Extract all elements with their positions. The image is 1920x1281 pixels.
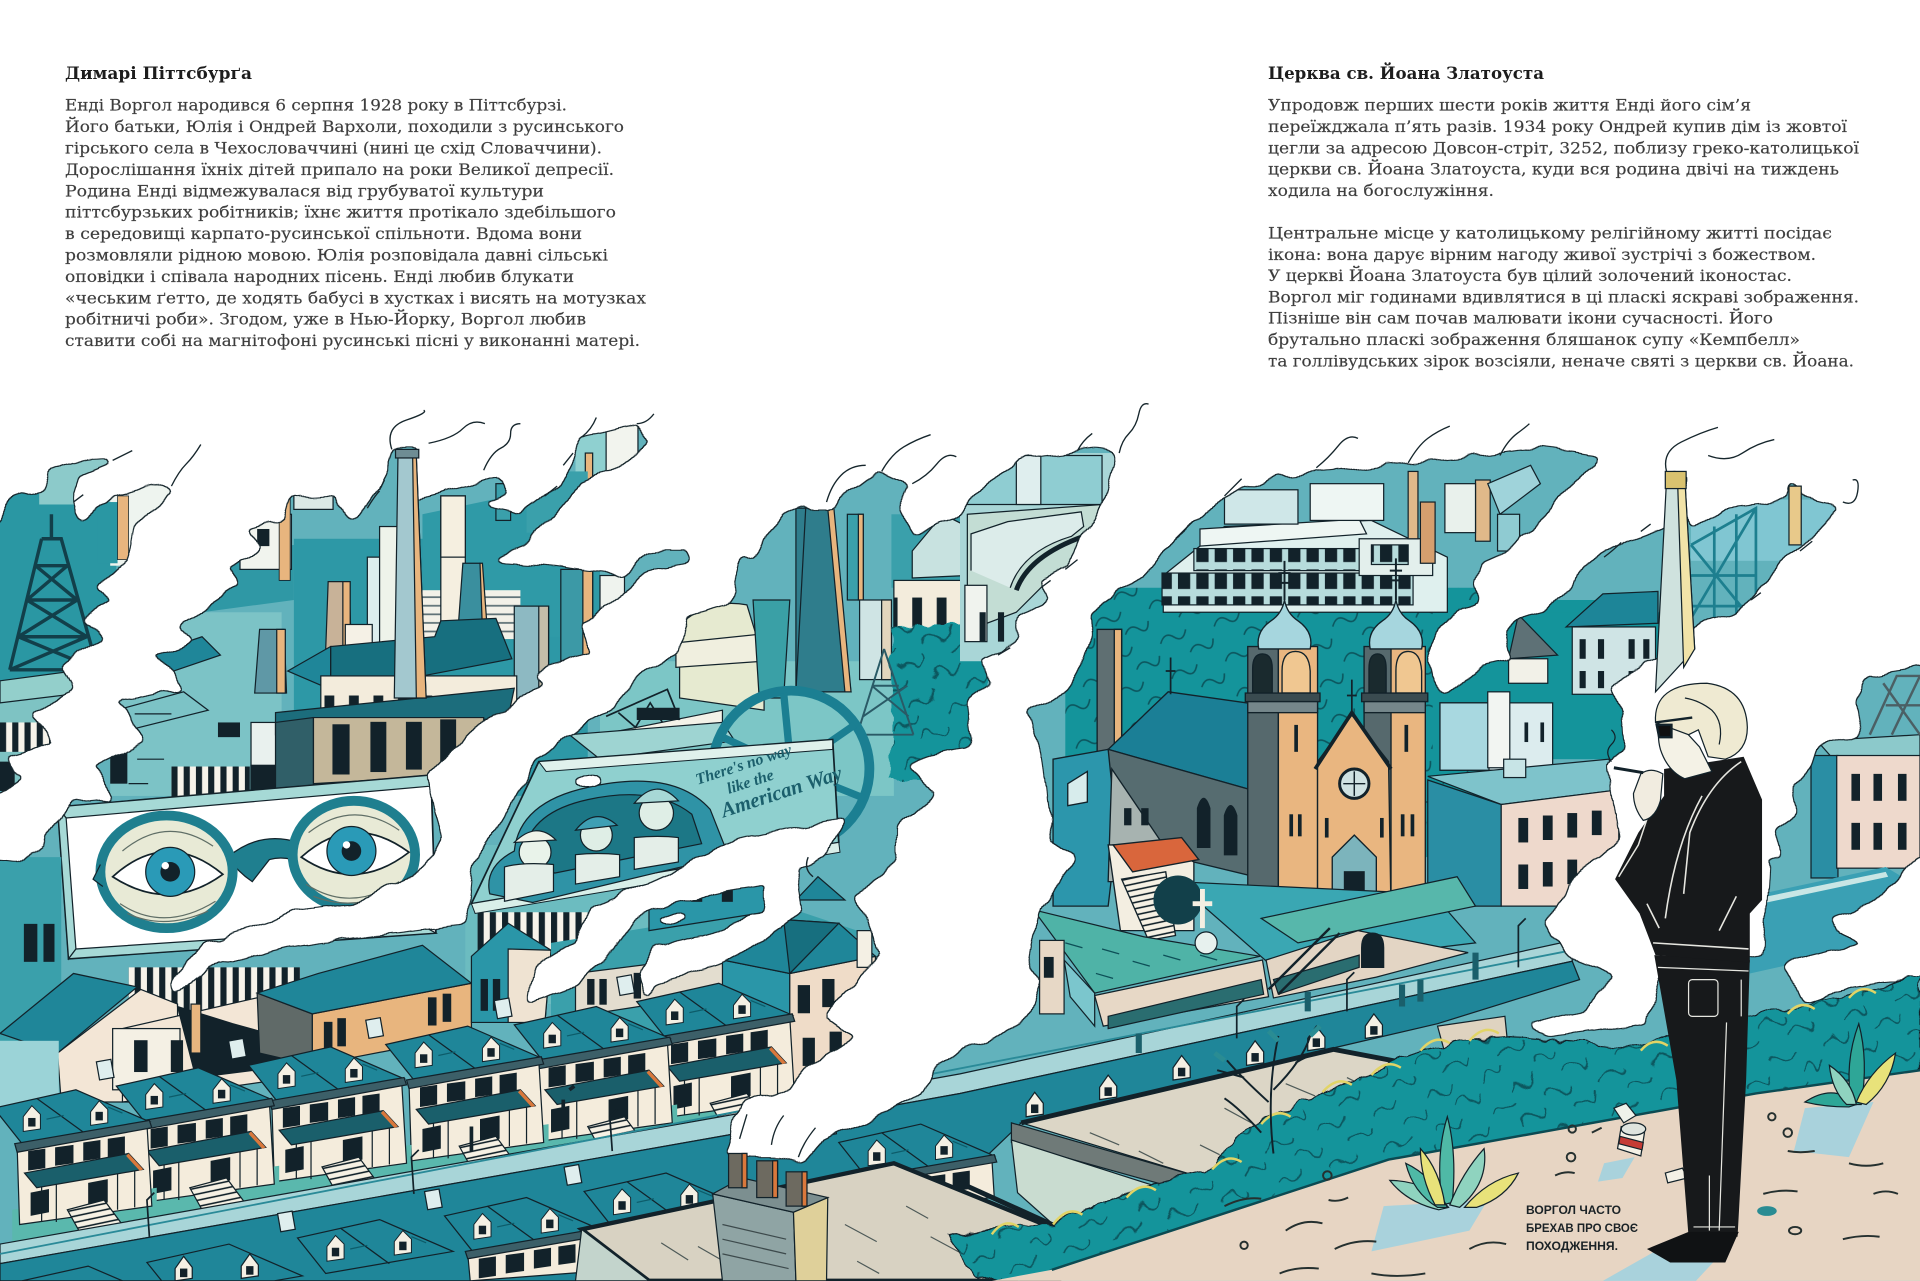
pale distant buildings upper centre: [960, 453, 1119, 661]
text block: Church of St John Chrysostom: ходила на богослужіння.: [1268, 182, 1494, 200]
factory block with chimneys: [251, 425, 638, 797]
text block: Pittsburgh chimneys: піттсбурзьких робітників; їхнє життя протікало здебільшого: [65, 204, 616, 222]
right edge building: [1750, 676, 1920, 973]
text block: Pittsburgh chimneys: Енді Воргол народився 6 серпня 1928 року в Піттсбурзі.: [65, 97, 567, 115]
text block: Church of St John Chrysostom: брутально пласкі зображення бляшанок супу «Кемпбелл»: [1268, 331, 1800, 349]
heading: Church of St John Chrysostom: Церква св. Йоана Златоуста: [1268, 62, 1544, 84]
car body: [489, 781, 729, 902]
scene base tone: [0, 416, 1920, 1281]
flat roof in the foreground right: [960, 1049, 1450, 1224]
church of St John Chrysostom: [1053, 558, 1428, 940]
Warhol figure in black jacket and trousers: [1608, 683, 1762, 1262]
text block: Church of St John Chrysostom: цегли за адресою Довсон-стріт, 3252, поблизу греко-католицької: [1268, 139, 1859, 157]
text block: Church of St John Chrysostom: та голлівудських зірок возсіяли, неначе святі з церкви св. Йоана.: [1268, 351, 1854, 370]
factory behind church: [1162, 465, 1540, 612]
text block: Pittsburgh chimneys: робітничі роби». Згодом, уже в Нью-Йорку, Воргол любив: [65, 310, 586, 329]
church facade with rose window: [1315, 713, 1391, 912]
figure head with white hair and glasses: [1655, 683, 1747, 779]
text block: Pittsburgh chimneys: Родина Енді відмежувалася від грубуватої культури: [65, 182, 544, 200]
icon: oil derrick lattice: [10, 514, 98, 670]
bare sapling: [1215, 1026, 1320, 1153]
church terrace, lawn and retaining wall: [1033, 876, 1476, 1029]
billboard slogan: [694, 729, 846, 827]
text block: Pittsburgh chimneys: розмовляли рідною мовою. Юлія розповідала давні сільські: [65, 246, 608, 264]
icon: right eye: [301, 815, 409, 903]
text block: Church of St John Chrysostom: Центральне місце у католицькому релігійному житті посідає: [1268, 224, 1832, 242]
forest behind church: [1065, 588, 1641, 857]
right hillside houses and truss: [1440, 500, 1838, 770]
heading: Pittsburgh chimneys: Димарі Піттсбурґа: [65, 64, 252, 84]
caption: Warhol often lied about his origins: ПОХОДЖЕННЯ.: [1526, 1239, 1618, 1253]
billboard two with family in a car: [471, 729, 846, 913]
text block: Church of St John Chrysostom: Пізніше він сам почав малювати ікони сучасності. Його: [1268, 309, 1773, 328]
text block: Pittsburgh chimneys: «чеським ґетто, де ходять бабусі в хустках і висять на мотузках: [65, 289, 646, 307]
icon: flywheel: [713, 691, 869, 847]
caption: Warhol often lied about his origins: [1526, 1203, 1638, 1253]
street lamps and small figures: [147, 918, 1526, 1237]
billboard slogan: There's no way: [694, 741, 795, 789]
church towers: [1245, 647, 1428, 910]
onion domes with crosses: [1166, 558, 1422, 716]
pink apartment building: [1428, 759, 1619, 906]
left oil derrick area: [0, 456, 174, 791]
text block: Pittsburgh chimneys: [65, 97, 646, 350]
chimneys standing clear of the smoke: [394, 449, 1801, 698]
sandy ground: [992, 1070, 1920, 1281]
ground marks and pebbles: [1224, 1113, 1898, 1276]
family faces: [504, 789, 678, 901]
caption: Warhol often lied about his origins: БРЕХАВ ПРО СВОЄ: [1526, 1221, 1638, 1235]
text block: Pittsburgh chimneys: Дорослішання їхніх дітей припало на роки Великої депресії.: [65, 161, 614, 179]
rows of terraced houses: [0, 975, 800, 1249]
caption: Warhol often lied about his origins: ВОРГОЛ ЧАСТО: [1526, 1203, 1621, 1217]
figure hand with cigarette: [1608, 730, 1663, 820]
figure trousers and shoes: [1647, 955, 1750, 1262]
smoke wisp lines: [73, 404, 1858, 1157]
left neighbouring house: [1053, 749, 1199, 940]
second row of houses and dormers: [22, 1014, 1509, 1281]
figure jacket and arm: [1615, 757, 1762, 962]
hedge along the hillside: [949, 973, 1920, 1281]
text block: Pittsburgh chimneys: в середовищі карпато-русинської спільноти. Вдома вони: [65, 225, 582, 243]
flat roof in the foreground left: [576, 1163, 1059, 1281]
back row of large houses: [0, 845, 876, 1114]
text block: Church of St John Chrysostom: Воргол міг годинами вдивлятися в ці пласкі яскраві зображення.: [1268, 288, 1859, 306]
street running across the town: [0, 940, 1580, 1281]
text block: Church of St John Chrysostom: ікона: вона дарує вірним нагоду живої зустрічі з божеством.: [1268, 246, 1816, 264]
text block: Church of St John Chrysostom: У церкві Йоана Златоуста був цілий золочений іконостас.: [1268, 266, 1792, 285]
text block: Pittsburgh chimneys: ставити собі на магнітофоні русинські пісні у виконанні матері.: [65, 332, 640, 350]
soup can and litter: [1614, 1103, 1687, 1183]
big billboard with glasses and eyes: [58, 775, 436, 959]
chimney stack with three flues: [713, 1153, 828, 1281]
icon: spectacle frames: [93, 801, 415, 928]
text block: Pittsburgh chimneys: Його батьки, Юлія і Ондрей Вархоли, походили з русинського: [65, 117, 624, 136]
distant dome, wheel and tower: [569, 508, 989, 847]
text block: Church of St John Chrysostom: церкви св. Йоана Златоуста, куди вся родина двічі на тиждень: [1268, 160, 1839, 179]
nave roof and wall: [1108, 692, 1255, 877]
agave plant large: [1390, 1117, 1518, 1210]
text block: Church of St John Chrysostom: переїжджала п’ять разів. 1934 року Ондрей купив дім із жовтої: [1268, 118, 1847, 136]
billboard slogan: American Way: [716, 760, 846, 823]
icon: left eye: [113, 831, 223, 921]
billboard slogan: like the: [725, 767, 776, 798]
left lobes with low buildings: [110, 495, 333, 798]
text block: Church of St John Chrysostom: [1268, 97, 1859, 370]
agave plant small: [1805, 1024, 1896, 1107]
text block: Pittsburgh chimneys: оповідки і співала народних пісень. Енді любив блукати: [65, 268, 574, 286]
text block: Pittsburgh chimneys: гірського села в Чехословаччині (нині це схід Словаччини).: [65, 140, 602, 158]
text block: Church of St John Chrysostom: Упродовж перших шести років життя Енді його сім’я: [1268, 97, 1751, 115]
